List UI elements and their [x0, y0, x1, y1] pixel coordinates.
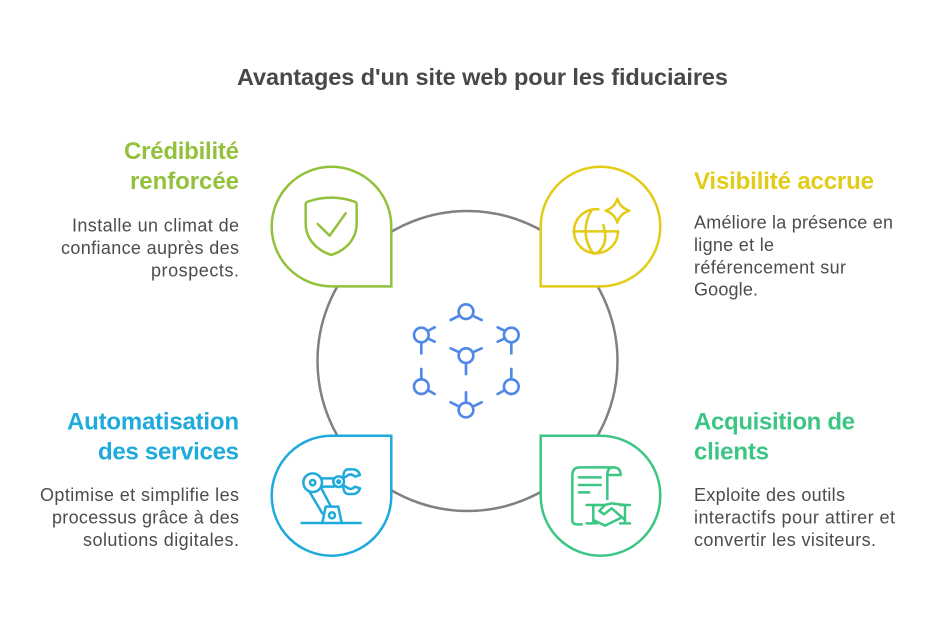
text block: acquisition: interactifs pour attirer et [694, 508, 895, 528]
text block: visibilité [694, 168, 893, 300]
text block: crédibilité: Installe un climat de [72, 216, 239, 236]
text block: automatisation: Optimise et simplifie les [40, 485, 239, 505]
panel: acquisition badge [541, 436, 660, 556]
panel: crédibilité badge [272, 167, 391, 286]
central ring [318, 211, 618, 511]
text block: automatisation: solutions digitales. [83, 530, 239, 550]
text block: visibilité: Visibilité accrue [694, 168, 874, 195]
text block: automatisation: des services [98, 438, 239, 466]
text block: visibilité: ligne et le [694, 235, 774, 255]
text block: visibilité: Améliore la présence en [694, 212, 893, 232]
text block: crédibilité: renforcée [130, 168, 239, 195]
text block: acquisition: Exploite des outils [694, 485, 845, 505]
text block: visibilité: Google. [694, 280, 758, 300]
text block: acquisition: convertir les visiteurs. [694, 530, 876, 550]
icon: globe with sparkle [574, 199, 629, 254]
icon: contract and handshake [572, 467, 630, 526]
icon: robot arm [302, 469, 361, 523]
text block: acquisition [694, 408, 895, 550]
text block: acquisition: clients [694, 438, 769, 466]
text block: crédibilité: confiance auprès des [61, 238, 239, 258]
icon: central network [414, 304, 519, 417]
text block: automatisation: Automatisation [67, 408, 239, 436]
panel: visibilité badge [541, 167, 660, 286]
panel: automatisation badge [272, 436, 391, 556]
text block: crédibilité: Crédibilité [124, 138, 239, 165]
text block: acquisition: Acquisition de [694, 408, 855, 436]
text block: automatisation [40, 408, 239, 550]
text block: crédibilité [61, 138, 239, 280]
icon: shield with check [306, 198, 357, 255]
title: Avantages d'un site web pour les fiduciaires [237, 64, 728, 90]
text block: automatisation: processus grâce à des [52, 508, 239, 528]
text block: crédibilité: prospects. [151, 260, 239, 280]
text block: visibilité: référencement sur [694, 258, 846, 278]
